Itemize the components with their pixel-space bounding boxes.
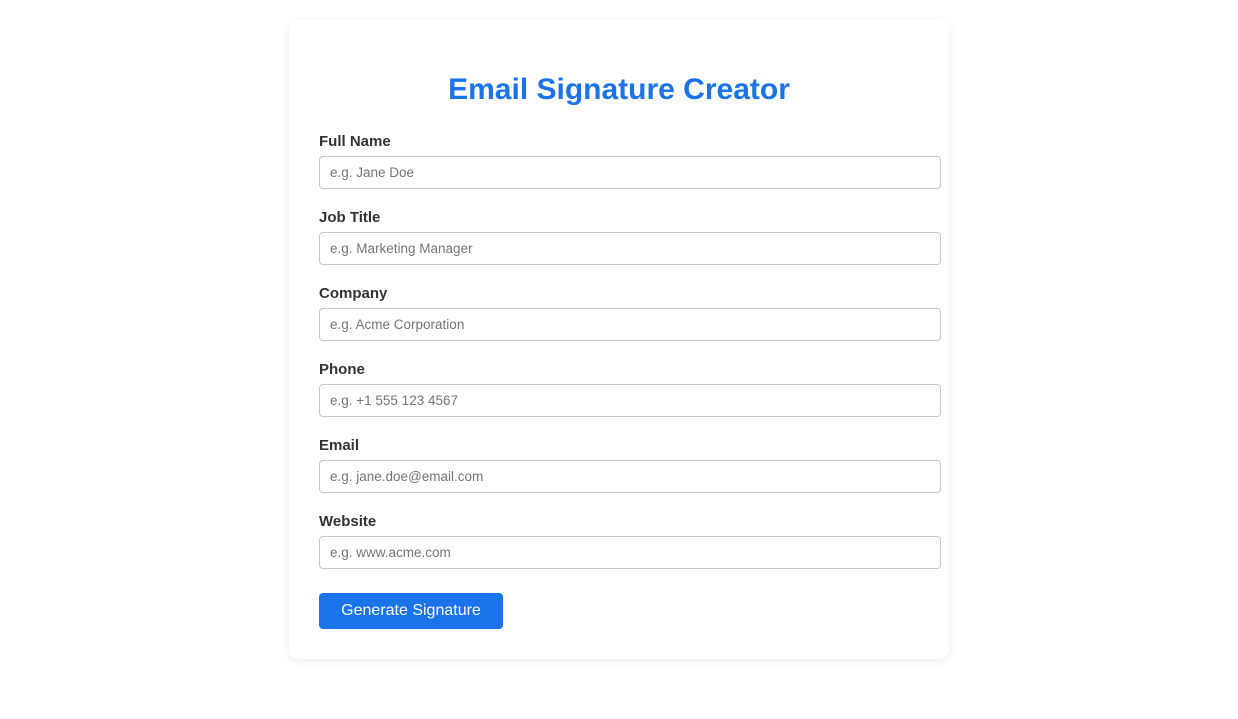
- label: email: Email: [319, 437, 359, 454]
- label: job title: Job Title: [319, 209, 380, 226]
- button: generate: Generate Signature: [341, 602, 481, 619]
- input: company: e.g. Acme Corporation: [330, 317, 464, 332]
- input: full name: [319, 156, 941, 189]
- label: company: Company: [319, 285, 387, 302]
- input: website: [319, 536, 941, 569]
- input: company: [319, 308, 941, 341]
- label: full name: Full Name: [319, 133, 391, 150]
- title: Email Signature Creator: [448, 73, 790, 106]
- button: generate: [319, 593, 503, 629]
- input: email: [319, 460, 941, 493]
- label: website: Website: [319, 513, 376, 530]
- input: job title: [319, 232, 941, 265]
- input: website: e.g. www.acme.com: [330, 545, 451, 560]
- label: phone: Phone: [319, 361, 365, 378]
- form card: [289, 20, 949, 659]
- input: full name: e.g. Jane Doe: [330, 165, 414, 180]
- input: phone: [319, 384, 941, 417]
- input: email: e.g. jane.doe@email.com: [330, 469, 483, 484]
- input: phone: e.g. +1 555 123 4567: [330, 393, 458, 408]
- input: job title: e.g. Marketing Manager: [330, 241, 473, 256]
